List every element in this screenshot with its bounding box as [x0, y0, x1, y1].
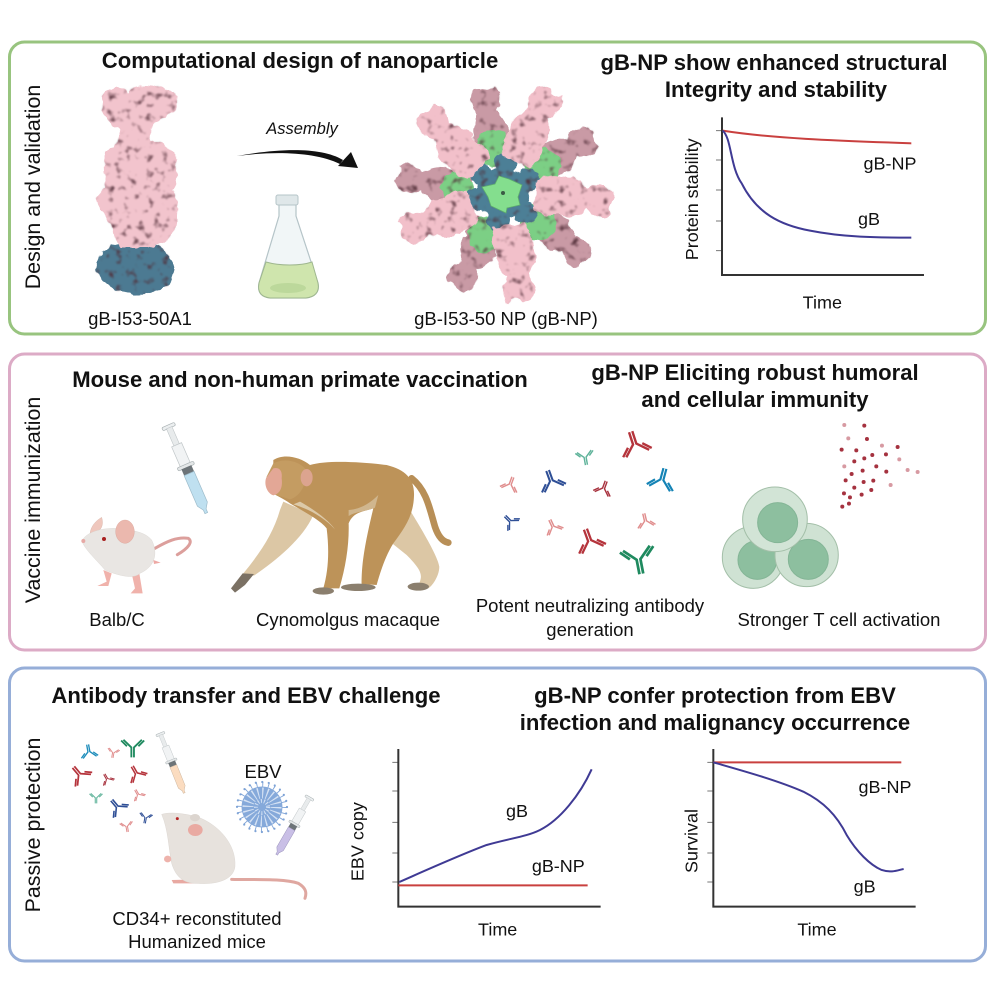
chart: survival: Survival — [682, 809, 702, 873]
arrow: assembly — [237, 150, 358, 168]
icon: white mouse — [81, 517, 190, 593]
label: antibody generation: generation — [546, 619, 634, 640]
chart: EBV copy: gB — [506, 801, 528, 821]
dark arms — [393, 85, 603, 297]
panel: passive protection — [10, 668, 986, 961]
chart: protein stability: gB-NP — [863, 153, 916, 173]
heading: enhanced integrity: gB-NP show enhanced structural — [600, 50, 948, 75]
light arms — [393, 81, 615, 305]
label: Balb/C: Balb/C — [89, 609, 145, 630]
antibodies cluster — [65, 740, 153, 833]
side label: vaccine immunization: Vaccine immunization — [21, 397, 45, 603]
heading: immunity: gB-NP Eliciting robust humoral — [591, 360, 919, 385]
chart: EBV copy: Time — [478, 920, 517, 940]
label: antibody generation: Potent neutralizing antibody — [476, 595, 705, 616]
icon: EBV virus — [237, 782, 287, 832]
chart: survival — [682, 749, 916, 940]
chart: EBV copy: EBV copy — [348, 802, 368, 881]
icon: orange syringe — [154, 731, 190, 795]
heading: antibody transfer: Antibody transfer and EBV challenge — [51, 683, 441, 708]
center pentamer — [482, 176, 522, 213]
icon: flask — [259, 195, 318, 298]
heading: vaccination: Mouse and non-human primate vaccination — [72, 367, 528, 392]
heading: protection: infection and malignancy occurrence — [520, 710, 910, 735]
heading: enhanced integrity: Integrity and stability — [665, 77, 888, 102]
panel: design and validation — [10, 42, 986, 334]
text: assembly: Assembly — [265, 120, 340, 138]
heading: protection: gB-NP confer protection from EBV — [534, 683, 896, 708]
icon: T cells — [722, 487, 838, 588]
center pore — [501, 191, 505, 195]
chart: survival: gB-NP — [858, 777, 911, 797]
chart: EBV copy — [348, 749, 601, 940]
chart: protein stability: Time — [803, 293, 842, 313]
chart: EBV copy: gB-NP — [532, 856, 585, 876]
icon: gB-NP nanoparticle — [393, 81, 615, 305]
side label: design and validation: Design and validation — [21, 85, 45, 289]
chart: protein stability: gB — [858, 209, 880, 229]
panel: vaccine immunization — [10, 354, 986, 650]
label: nanoparticle: gB-I53-50 NP (gB-NP) — [414, 308, 598, 329]
icon: humanized mouse — [162, 813, 306, 898]
icon: macaque — [231, 456, 448, 595]
heading: immunity: and cellular immunity — [641, 387, 869, 412]
icon: blue syringe — [160, 421, 214, 517]
chart: protein stability — [682, 117, 924, 313]
icon: cytokine dots — [840, 423, 920, 509]
label: mice: CD34+ reconstituted — [112, 908, 282, 929]
chart: survival: gB — [854, 876, 876, 896]
label: monomer: gB-I53-50A1 — [88, 308, 192, 329]
heading: computational design: Computational design of nanoparticle — [102, 48, 498, 73]
text: EBV: EBV — [244, 761, 282, 782]
icon: purple syringe — [271, 794, 315, 858]
label: mice: Humanized mice — [128, 931, 266, 952]
label: macaque: Cynomolgus macaque — [256, 609, 440, 630]
green and blue core — [441, 130, 561, 252]
side label: passive protection: Passive protection — [21, 738, 45, 912]
chart: survival: Time — [797, 920, 837, 940]
antibodies cluster — [499, 427, 678, 577]
chart: protein stability: Protein stability — [682, 138, 702, 260]
icon: gB-I53-50A1 monomer protein — [97, 85, 178, 294]
label: T cell activation: Stronger T cell activation — [738, 609, 940, 630]
